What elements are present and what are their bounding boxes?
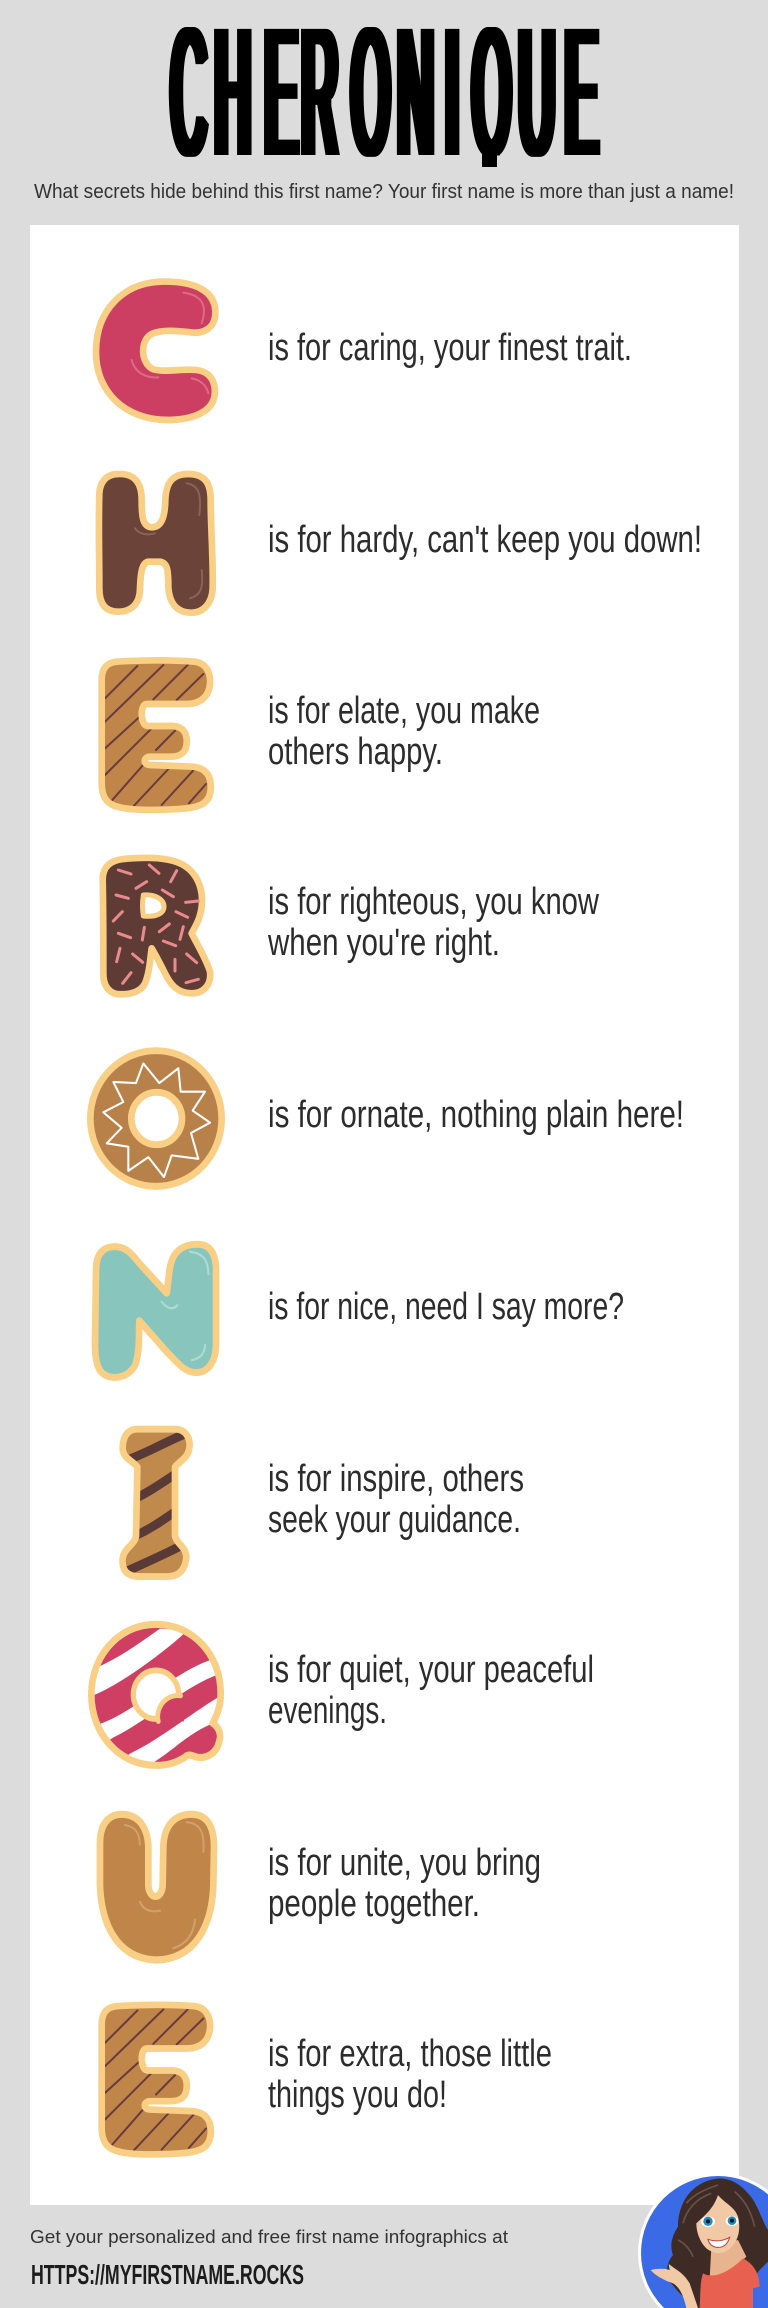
letter icon: R [103, 858, 210, 994]
letter icon: N [95, 1244, 216, 1377]
letter icon: H [99, 474, 213, 613]
letter icon: E (second) [102, 2005, 211, 2154]
letter icon: U [100, 1814, 214, 1960]
text: N line: is for nice, need I say more? [268, 1286, 624, 1328]
panel: white card [30, 225, 739, 2205]
text: I lines: seek your guidance. [268, 1499, 521, 1541]
text: C line: is for caring, your finest trait. [268, 327, 632, 369]
letter icon: Q [80, 1624, 230, 1771]
text: I lines: is for inspire, others [268, 1458, 524, 1500]
footer url: HTTPS://MYFIRSTNAME.ROCKS [31, 2259, 304, 2290]
text: R lines: when you're right. [267, 922, 500, 964]
subtitle: What secrets hide behind this first name? Your first name is more than just a name! [34, 181, 734, 203]
text: U lines: people together. [268, 1883, 480, 1925]
text: E lines: is for elate, you make [268, 690, 540, 732]
text: R lines: is for righteous, you know [268, 881, 599, 923]
text: U lines: is for unite, you bring [268, 1842, 541, 1884]
letter icon: C [96, 282, 215, 420]
avatar: woman in blue circle [638, 2173, 768, 2308]
letter icon: O [90, 1051, 222, 1186]
text: second E lines: things you do! [268, 2074, 447, 2116]
text: Q lines: evenings. [268, 1690, 387, 1732]
letter icon: E [102, 660, 211, 810]
text: Q lines: is for quiet, your peaceful [268, 1649, 594, 1691]
text: E lines: others happy. [268, 731, 443, 773]
letter icon: I [123, 1429, 190, 1577]
footer text: Get your personalized and free first name infographics at [30, 2226, 508, 2247]
text: second E lines: is for extra, those little [268, 2033, 552, 2075]
